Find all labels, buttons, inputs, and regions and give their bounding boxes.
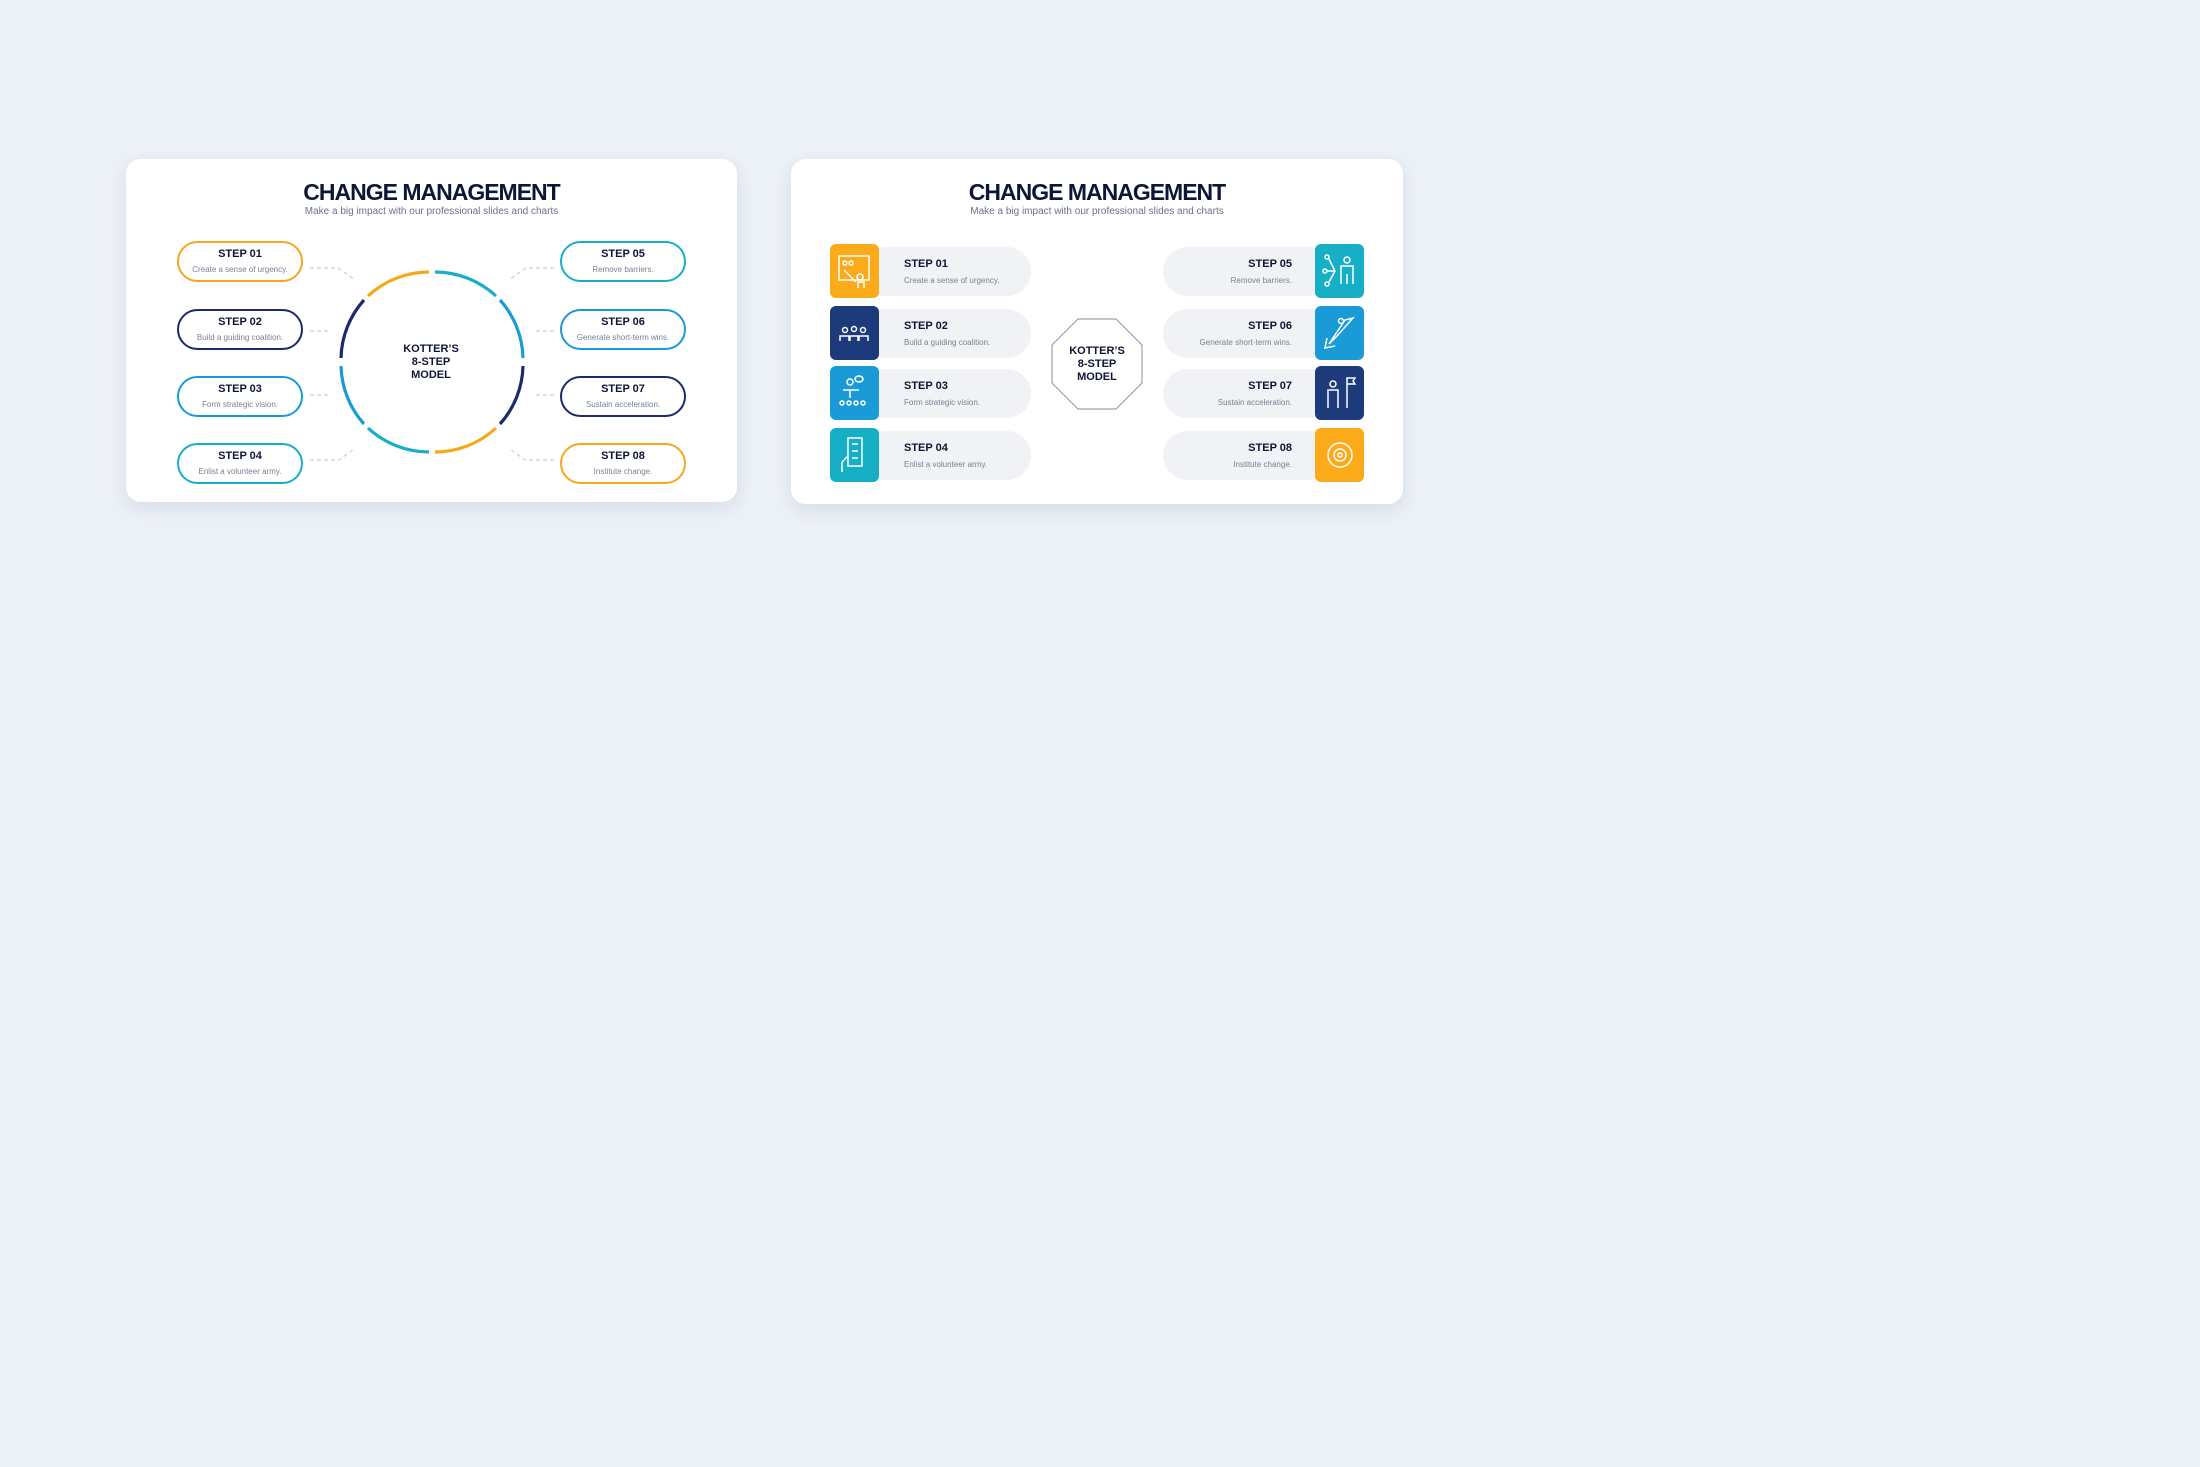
step 06	[560, 309, 686, 350]
step 06 row: STEP 06	[1248, 320, 1292, 332]
step 04: STEP 04	[218, 450, 262, 462]
step 03	[177, 376, 303, 417]
step 07 row	[1163, 366, 1364, 420]
step 08 row: STEP 08	[1248, 442, 1292, 454]
step 01	[177, 241, 303, 282]
step 04: Enlist a volunteer army.	[198, 467, 282, 476]
step 01: STEP 01	[218, 248, 262, 260]
step 08 row: Institute change.	[1233, 460, 1292, 469]
step 04 row	[830, 428, 1031, 482]
step 05: Remove barriers.	[592, 265, 654, 274]
octagon center: MODEL	[1077, 371, 1117, 383]
step 01 row: STEP 01	[904, 258, 948, 270]
step 03: Form strategic vision.	[202, 400, 278, 409]
step 06: Generate short-term wins.	[577, 333, 669, 342]
step 07	[560, 376, 686, 417]
step 02 row: STEP 02	[904, 320, 948, 332]
step 03 row: STEP 03	[904, 380, 948, 392]
step 01: Create a sense of urgency.	[192, 265, 288, 274]
step 06 row	[1163, 306, 1364, 360]
center label	[403, 343, 459, 381]
step 03 row: Form strategic vision.	[904, 398, 980, 407]
subtitle: Make a big impact with our professional slides and charts	[305, 206, 558, 217]
step 04 row: Enlist a volunteer army.	[904, 460, 987, 469]
step 02 row: Build a guiding coalition.	[904, 338, 990, 347]
step 01 row: Create a sense of urgency.	[904, 276, 999, 285]
step 02	[177, 309, 303, 350]
center label: MODEL	[411, 369, 451, 381]
step 05 row: STEP 05	[1248, 258, 1292, 270]
step 01 row	[830, 244, 1031, 298]
octagon center: 8-STEP	[1078, 358, 1116, 370]
step 08	[560, 443, 686, 484]
step 07: STEP 07	[601, 383, 645, 395]
panel: circle model	[126, 159, 737, 502]
step 04	[177, 443, 303, 484]
step 02: Build a guiding coalition.	[197, 333, 283, 342]
octagon center: KOTTER’S	[1069, 345, 1125, 357]
step 07 row: Sustain acceleration.	[1218, 398, 1292, 407]
step 07: Sustain acceleration.	[586, 400, 660, 409]
step 03 row	[830, 366, 1031, 420]
step 06: STEP 06	[601, 316, 645, 328]
step 07 row: STEP 07	[1248, 380, 1292, 392]
center label: KOTTER’S	[403, 343, 459, 355]
step 05	[560, 241, 686, 282]
step 08: Institute change.	[594, 467, 652, 476]
octagon center	[1051, 318, 1143, 410]
step 08 row	[1163, 428, 1364, 482]
step 06 row: Generate short-term wins.	[1200, 338, 1292, 347]
step 05 row: Remove barriers.	[1231, 276, 1292, 285]
title: CHANGE MANAGEMENT	[969, 179, 1225, 205]
subtitle: Make a big impact with our professional slides and charts	[970, 206, 1224, 217]
step 05: STEP 05	[601, 248, 645, 260]
title: CHANGE MANAGEMENT	[303, 179, 560, 205]
step 05 row	[1163, 244, 1364, 298]
step 04 row: STEP 04	[904, 442, 948, 454]
step 02 row	[830, 306, 1031, 360]
panel: icon list model	[791, 159, 1403, 504]
center label: 8-STEP	[412, 356, 450, 368]
step 08: STEP 08	[601, 450, 645, 462]
circle diagram	[310, 267, 554, 461]
step 02: STEP 02	[218, 316, 262, 328]
step 03: STEP 03	[218, 383, 262, 395]
